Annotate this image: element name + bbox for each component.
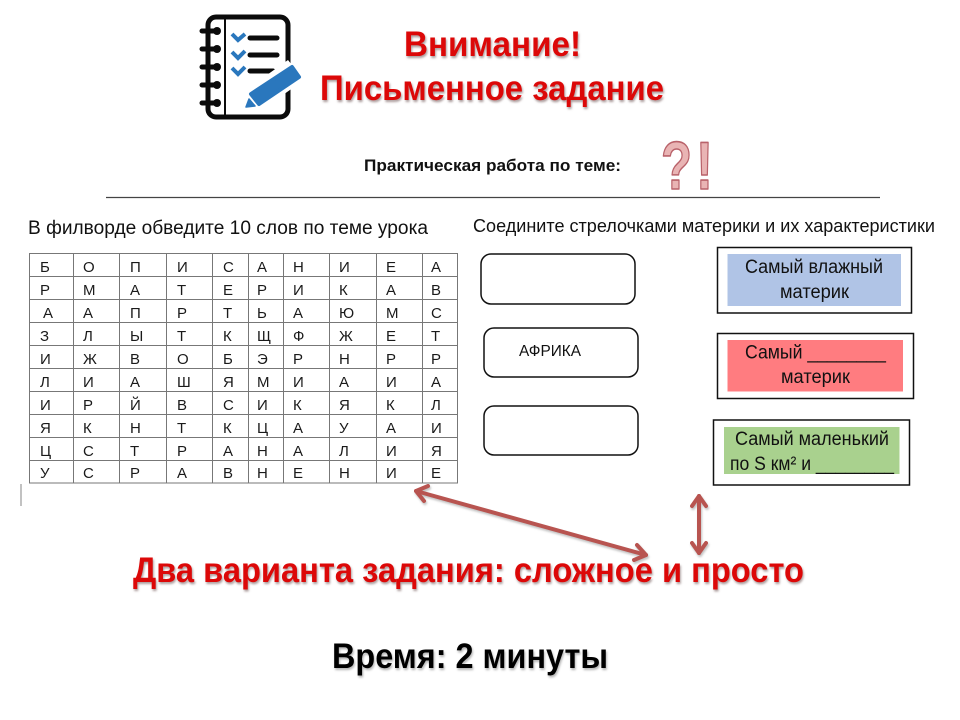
word search grid: Н bbox=[257, 465, 268, 482]
heading: practical work: Практическая работа по теме: bbox=[364, 156, 621, 175]
card: smallest continent: по S км² и ________ bbox=[730, 454, 894, 475]
word search grid: Т bbox=[177, 282, 186, 299]
word search grid: И bbox=[386, 465, 397, 482]
word search grid: И bbox=[257, 397, 268, 414]
word search grid: А bbox=[431, 259, 441, 276]
word search grid: Ь bbox=[257, 305, 267, 322]
word search grid: И bbox=[431, 420, 442, 437]
card: wettest continent bbox=[718, 248, 912, 313]
word search grid: И bbox=[293, 374, 304, 391]
word search grid: В bbox=[431, 282, 441, 299]
word search grid bbox=[30, 254, 458, 483]
word search grid: Я bbox=[40, 420, 51, 437]
word search grid: Т bbox=[223, 305, 232, 322]
word search grid: У bbox=[339, 420, 349, 437]
word search grid: И bbox=[386, 374, 397, 391]
word search grid: Я bbox=[223, 374, 234, 391]
word search grid: К bbox=[223, 420, 232, 437]
word search grid: М bbox=[83, 282, 96, 299]
word search grid: К bbox=[339, 282, 348, 299]
word search grid: А bbox=[386, 282, 396, 299]
word search grid: У bbox=[40, 465, 50, 482]
word search grid: В bbox=[177, 397, 187, 414]
word search grid: И bbox=[293, 282, 304, 299]
word search grid: Р bbox=[386, 351, 396, 368]
word search grid: С bbox=[83, 465, 94, 482]
word search grid: М bbox=[257, 374, 270, 391]
word search grid: Ж bbox=[339, 328, 353, 345]
word search grid: А bbox=[431, 374, 441, 391]
word search grid: Ш bbox=[177, 374, 191, 391]
word search grid: А bbox=[177, 465, 187, 482]
word search grid: Б bbox=[40, 259, 50, 276]
word search grid: И bbox=[83, 374, 94, 391]
empty continent box 1 bbox=[481, 254, 635, 304]
card: wettest continent: Самый влажный bbox=[745, 257, 883, 278]
word search grid: О bbox=[83, 259, 95, 276]
instruction: connect with arrows: Соедините стрелочками материки и их характеристики bbox=[473, 215, 935, 236]
word search grid: С bbox=[83, 443, 94, 460]
word search grid: А bbox=[130, 282, 140, 299]
word search grid: Л bbox=[431, 397, 441, 414]
word search grid: К bbox=[386, 397, 395, 414]
word search grid: Л bbox=[83, 328, 93, 345]
word search grid: Р bbox=[177, 305, 187, 322]
word search grid: Р bbox=[83, 397, 93, 414]
word search grid: К bbox=[293, 397, 302, 414]
word search grid: З bbox=[40, 328, 49, 345]
icon: notebook with checklist and pencil bbox=[202, 17, 304, 117]
word search grid: О bbox=[177, 351, 189, 368]
word search grid: Л bbox=[40, 374, 50, 391]
card: blank continent: Самый ________ bbox=[745, 342, 886, 364]
word search grid: Р bbox=[130, 465, 140, 482]
word search grid: Е bbox=[293, 465, 303, 482]
word search grid: Я bbox=[339, 397, 350, 414]
word search grid: А bbox=[43, 305, 53, 322]
word search grid: Ж bbox=[83, 351, 97, 368]
word search grid: К bbox=[223, 328, 232, 345]
word search grid: Р bbox=[40, 282, 50, 299]
word search grid: Т bbox=[130, 443, 139, 460]
card: smallest continent bbox=[714, 420, 910, 485]
word search grid: С bbox=[223, 397, 234, 414]
arrow: to word search bbox=[416, 486, 646, 560]
card: wettest continent: материк bbox=[780, 282, 850, 303]
word search grid: Т bbox=[431, 328, 440, 345]
word search grid: Н bbox=[130, 420, 141, 437]
word search grid: А bbox=[293, 443, 303, 460]
word search grid: Ц bbox=[257, 420, 268, 437]
word search grid: Я bbox=[431, 443, 442, 460]
word search grid: Е bbox=[386, 328, 396, 345]
word search grid: И bbox=[339, 259, 350, 276]
icon: question and exclamation marks: ! bbox=[696, 128, 713, 204]
arrow: to continent cards bbox=[692, 496, 706, 553]
word search grid: Б bbox=[223, 351, 233, 368]
word search grid: П bbox=[130, 259, 141, 276]
empty continent box 3 bbox=[484, 406, 638, 455]
word search grid: Р bbox=[431, 351, 441, 368]
word search grid: П bbox=[130, 305, 141, 322]
word search grid: Н bbox=[293, 259, 304, 276]
card: blank continent: материк bbox=[781, 367, 851, 388]
word search grid: Е bbox=[431, 465, 441, 482]
title: Внимание! bbox=[404, 25, 581, 64]
continent box: Africa: АФРИКА bbox=[519, 343, 581, 360]
icon: question and exclamation marks: ? bbox=[661, 128, 692, 204]
word search grid: Щ bbox=[257, 328, 271, 345]
word search grid: Т bbox=[177, 328, 186, 345]
word search grid: А bbox=[386, 420, 396, 437]
word search grid: Э bbox=[257, 351, 268, 368]
word search grid: А bbox=[257, 259, 267, 276]
word search grid: Л bbox=[339, 443, 349, 460]
word search grid: А bbox=[223, 443, 233, 460]
word search grid: Н bbox=[257, 443, 268, 460]
word search grid: Ц bbox=[40, 443, 51, 460]
word search grid: А bbox=[293, 305, 303, 322]
word search grid: Н bbox=[339, 351, 350, 368]
card: smallest continent: Самый маленький bbox=[735, 429, 889, 450]
word search grid: А bbox=[339, 374, 349, 391]
word search grid: Р bbox=[177, 443, 187, 460]
word search grid: А bbox=[293, 420, 303, 437]
word search grid: В bbox=[223, 465, 233, 482]
word search grid: Н bbox=[339, 465, 350, 482]
card: blank continent bbox=[718, 334, 914, 398]
continent box: Africa bbox=[484, 328, 638, 377]
title: Письменное задание bbox=[320, 69, 664, 108]
word search grid: В bbox=[130, 351, 140, 368]
word search grid: И bbox=[386, 443, 397, 460]
word search grid: С bbox=[431, 305, 442, 322]
word search grid: Ф bbox=[293, 328, 304, 345]
word search grid: Й bbox=[130, 396, 141, 414]
word search grid: А bbox=[83, 305, 93, 322]
word search grid: Т bbox=[177, 420, 186, 437]
word search grid: Е bbox=[223, 282, 233, 299]
callout: time limit: Время: 2 минуты bbox=[332, 637, 608, 676]
word search grid: Е bbox=[386, 259, 396, 276]
word search grid: И bbox=[40, 351, 51, 368]
word search grid: И bbox=[40, 397, 51, 414]
word search grid: Ы bbox=[130, 328, 143, 345]
word search grid: И bbox=[177, 259, 188, 276]
word search grid: Р bbox=[293, 351, 303, 368]
word search grid: А bbox=[130, 374, 140, 391]
word search grid: М bbox=[386, 305, 398, 322]
instruction: word search: В филворде обведите 10 слов по теме урока bbox=[28, 218, 428, 239]
word search grid: Ю bbox=[339, 305, 354, 322]
callout: two task variants: Два варианта задания: сложное и просто bbox=[133, 551, 804, 590]
word search grid: К bbox=[83, 420, 92, 437]
title bbox=[320, 25, 664, 108]
word search grid: С bbox=[223, 259, 234, 276]
word search grid: Р bbox=[257, 282, 267, 299]
